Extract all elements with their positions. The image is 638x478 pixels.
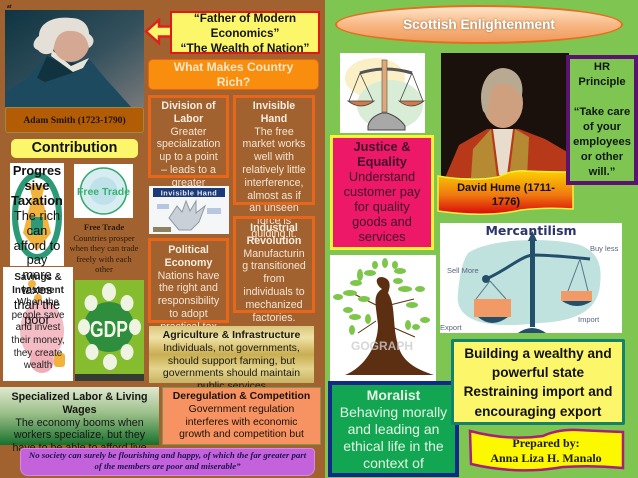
text: greater (172, 177, 205, 189)
image: mercantilism (440, 223, 622, 333)
image: invisible hand (149, 186, 229, 234)
quote banner: of the members are poor and miserable” (94, 460, 241, 470)
portrait: David Hume (441, 53, 569, 178)
panel: invisible hand text: interference, (245, 177, 303, 189)
panel: moralist: Behaving morally (340, 404, 447, 420)
text: progressive taxation: afford to (14, 238, 60, 253)
title ribbon: Scottish Enlightenment: Scottish Enlightenment (403, 17, 555, 32)
heading: what makes country rich: What Makes Country (174, 60, 293, 74)
callout: father of modern economics (144, 11, 320, 55)
panel: deregulation and competition: Deregulation & Competition (173, 391, 310, 402)
panel: HR principle: or other (581, 151, 623, 163)
text box: “The Wealth of Nation” (181, 41, 309, 55)
panel: division of labor: Labor (174, 113, 203, 125)
panel: division of labor (148, 95, 229, 178)
text: progressive taxation: The rich (14, 208, 60, 223)
panel: division of labor: Greater (171, 126, 206, 138)
text: savings and investment: and invest (16, 322, 60, 333)
image: mercantilism: Buy less (590, 244, 619, 253)
panel: moralist: Moralist (367, 387, 420, 403)
panel: building a wealthy state: powerful state (492, 365, 584, 380)
panel: division of labor: – leads to a (161, 164, 216, 176)
panel: specialized labor: Wages (62, 404, 97, 416)
panel: deregulation and competition (162, 387, 321, 445)
icon: GDP: GDP (90, 316, 128, 342)
text: force is (257, 215, 291, 227)
panel: industrial revolution: from (263, 273, 285, 285)
panel: deregulation and competition: interferes with economic (185, 417, 298, 428)
panel: invisible hand text: Invisible (253, 100, 295, 112)
icon: money tie wreath (12, 172, 62, 260)
panel: justice and equality: customer pay (344, 184, 420, 199)
panel: political economy: Political (168, 244, 209, 256)
panel: division of labor: Division of (161, 100, 216, 112)
text: free trade: when they can trade (70, 243, 138, 253)
panel: invisible hand text (233, 95, 315, 205)
image: mercantilism: Sell More (447, 266, 479, 275)
panel: agriculture and infrastructure: governments should maintain (163, 367, 300, 379)
panel: HR principle: Principle (578, 76, 626, 88)
text: progressive taxation: sive (25, 178, 49, 193)
image: tree woman: GOGRAPH (351, 339, 413, 353)
panel: industrial revolution (233, 216, 315, 313)
icon: GDP (75, 280, 144, 381)
panel: invisible hand text: market works (242, 138, 305, 150)
text: progressive taxation: than the (14, 297, 60, 312)
panel: moralist (328, 381, 459, 477)
text: savings and investment: wealth (24, 360, 52, 371)
text: savings and investment: When the (17, 297, 59, 308)
text: progressive taxation: taxes (22, 282, 52, 297)
text: free trade: Countries prosper (73, 232, 135, 242)
panel: agriculture and infrastructure: Agriculture & Infrastructure (163, 329, 300, 341)
text: progressive taxation (11, 163, 63, 327)
small corner mark: at (7, 4, 11, 10)
name plate (5, 107, 144, 133)
panel: industrial revolution: g transitioned (242, 260, 306, 272)
text: savings and investment: Savings & (14, 272, 62, 283)
portrait: Adam Smith (5, 10, 144, 107)
text: progressive taxation: poor (24, 312, 50, 327)
arrow (144, 17, 170, 46)
panel: specialized labor (0, 387, 159, 445)
panel: specialized labor: workers specialize, but they (14, 429, 145, 441)
image: invisible hand: Invisible Hand (161, 188, 217, 197)
text: practical tax (160, 321, 217, 333)
image: mercantilism: Import (578, 315, 600, 324)
panel: invisible hand text: well with (254, 151, 294, 163)
banner: David Hume: David Hume (1711- (457, 182, 555, 194)
text: savings and investment: Investment (12, 285, 64, 296)
panel: building a wealthy state: Restraining import and (464, 384, 612, 399)
panel: justice and equality: goods and (352, 214, 412, 229)
panel: savings and investment (3, 267, 73, 381)
panel: building a wealthy state: Building a wealthy and (464, 346, 612, 361)
panel: moralist: context of (363, 455, 424, 471)
panel: invisible hand text: almost as if (247, 190, 301, 202)
panel: justice and equality: Understand (349, 169, 415, 184)
left brown panel (0, 0, 325, 478)
banner: prepared by: Prepared by: (512, 436, 580, 450)
panel: deregulation and competition: growth and competition but (179, 429, 304, 440)
text: guiding it. (251, 228, 297, 240)
panel: political economy: Nations have (158, 270, 219, 282)
panel: justice and equality: Justice & (354, 139, 410, 154)
title ribbon: Scottish Enlightenment (335, 5, 623, 44)
image: mercantilism: Mercantilism (485, 223, 577, 238)
image: mercantilism: Export (440, 323, 463, 332)
panel: invisible hand text: relatively little (242, 164, 306, 176)
banner: prepared by (468, 428, 624, 472)
text: savings and investment: they create (14, 348, 62, 359)
text: progressive taxation: Progres (13, 163, 61, 178)
panel: industrial revolution: mechanized (245, 299, 303, 311)
panel: building a wealthy state (451, 339, 625, 425)
heading: what makes country rich: Rich? (217, 75, 250, 89)
text box: “Father of Modern (194, 11, 296, 25)
panel: invisible hand text: Hand (261, 113, 287, 125)
text: factories. (252, 312, 295, 324)
text box (170, 11, 320, 54)
panel: justice and equality (330, 135, 434, 250)
panel: agriculture and infrastructure: Individuals, not governments, (163, 342, 300, 354)
panel: deregulation and competition: Government regulation (189, 404, 294, 415)
panel: political economy: the right and (159, 282, 218, 294)
panel: agriculture and infrastructure (149, 326, 314, 383)
panel: political economy (148, 238, 229, 323)
heading: what makes country rich (148, 59, 319, 90)
text: progressive taxation: more (22, 267, 52, 282)
panel: division of labor: specialization (157, 138, 220, 150)
panel: HR principle: will.” (589, 166, 615, 178)
text: an unseen (249, 202, 299, 214)
panel: industrial revolution: individuals to (243, 286, 305, 298)
icon: piggy bank (20, 280, 65, 373)
panel: industrial revolution: Industrial (250, 222, 298, 234)
panel: HR principle: employees (573, 136, 631, 148)
panel: industrial revolution: Revolution (247, 235, 301, 247)
banner: prepared by: Anna Liza H. Manalo (490, 451, 602, 465)
text: progressive taxation: pay (27, 252, 47, 267)
panel: progressive taxation (10, 163, 64, 266)
image: justice scales (340, 53, 425, 133)
banner: David Hume: 1776) (492, 196, 520, 208)
panel: HR principle: HR (594, 61, 610, 73)
icon: free trade globe: Free Trade (77, 186, 130, 198)
text: free trade (70, 222, 138, 274)
icon: free trade globe (74, 164, 133, 218)
text box: Economics” (211, 26, 279, 40)
panel: HR principle (566, 55, 638, 185)
panel: building a wealthy state: encouraging export (475, 404, 601, 419)
panel: invisible hand text: The free (254, 126, 294, 138)
text: public services (197, 380, 266, 392)
panel: moralist: ethical life in the (343, 438, 444, 454)
panel: specialized labor: Specialized Labor & Living (12, 391, 148, 403)
panel: justice and equality: Equality (357, 154, 407, 169)
panel: division of labor: up to a point (159, 151, 218, 163)
panel: specialized labor: The economy booms when (15, 417, 144, 429)
panel: political economy: to adopt (169, 308, 208, 320)
panel: HR principle: of your (583, 121, 621, 133)
text: savings and investment: their money, (11, 335, 65, 346)
panel: moralist: and leading an (348, 421, 439, 437)
heading: Contribution (11, 139, 138, 158)
text: free trade: other (95, 264, 113, 274)
quote banner (20, 448, 315, 476)
banner: David Hume (437, 170, 574, 215)
panel: political economy: responsibility (158, 295, 219, 307)
text: progressive taxation: Taxation (11, 193, 63, 208)
panel: justice and equality: services (359, 229, 405, 244)
panel: HR principle: “Take care (574, 106, 630, 118)
text: savings and investment (11, 272, 65, 371)
text: progressive taxation: can (27, 223, 47, 238)
panel: agriculture and infrastructure: should support farming, but (168, 355, 295, 367)
heading: Contribution: Contribution (32, 140, 117, 156)
quote banner: No society can surely be flourishing and happy, of which the far greater part (29, 450, 306, 460)
panel: industrial revolution: Manufacturin (243, 248, 305, 260)
panel: justice and equality: for quality (354, 199, 410, 214)
name plate: Adam Smith (1723-1790) (23, 115, 126, 126)
panel: political economy: Economy (165, 257, 212, 269)
text: free trade: Free Trade (84, 222, 124, 232)
text: have to be able to afford live (12, 442, 147, 454)
image: tree woman (330, 255, 436, 381)
text: free trade: freely with each (76, 254, 132, 264)
text: savings and investment: people save (12, 310, 64, 321)
